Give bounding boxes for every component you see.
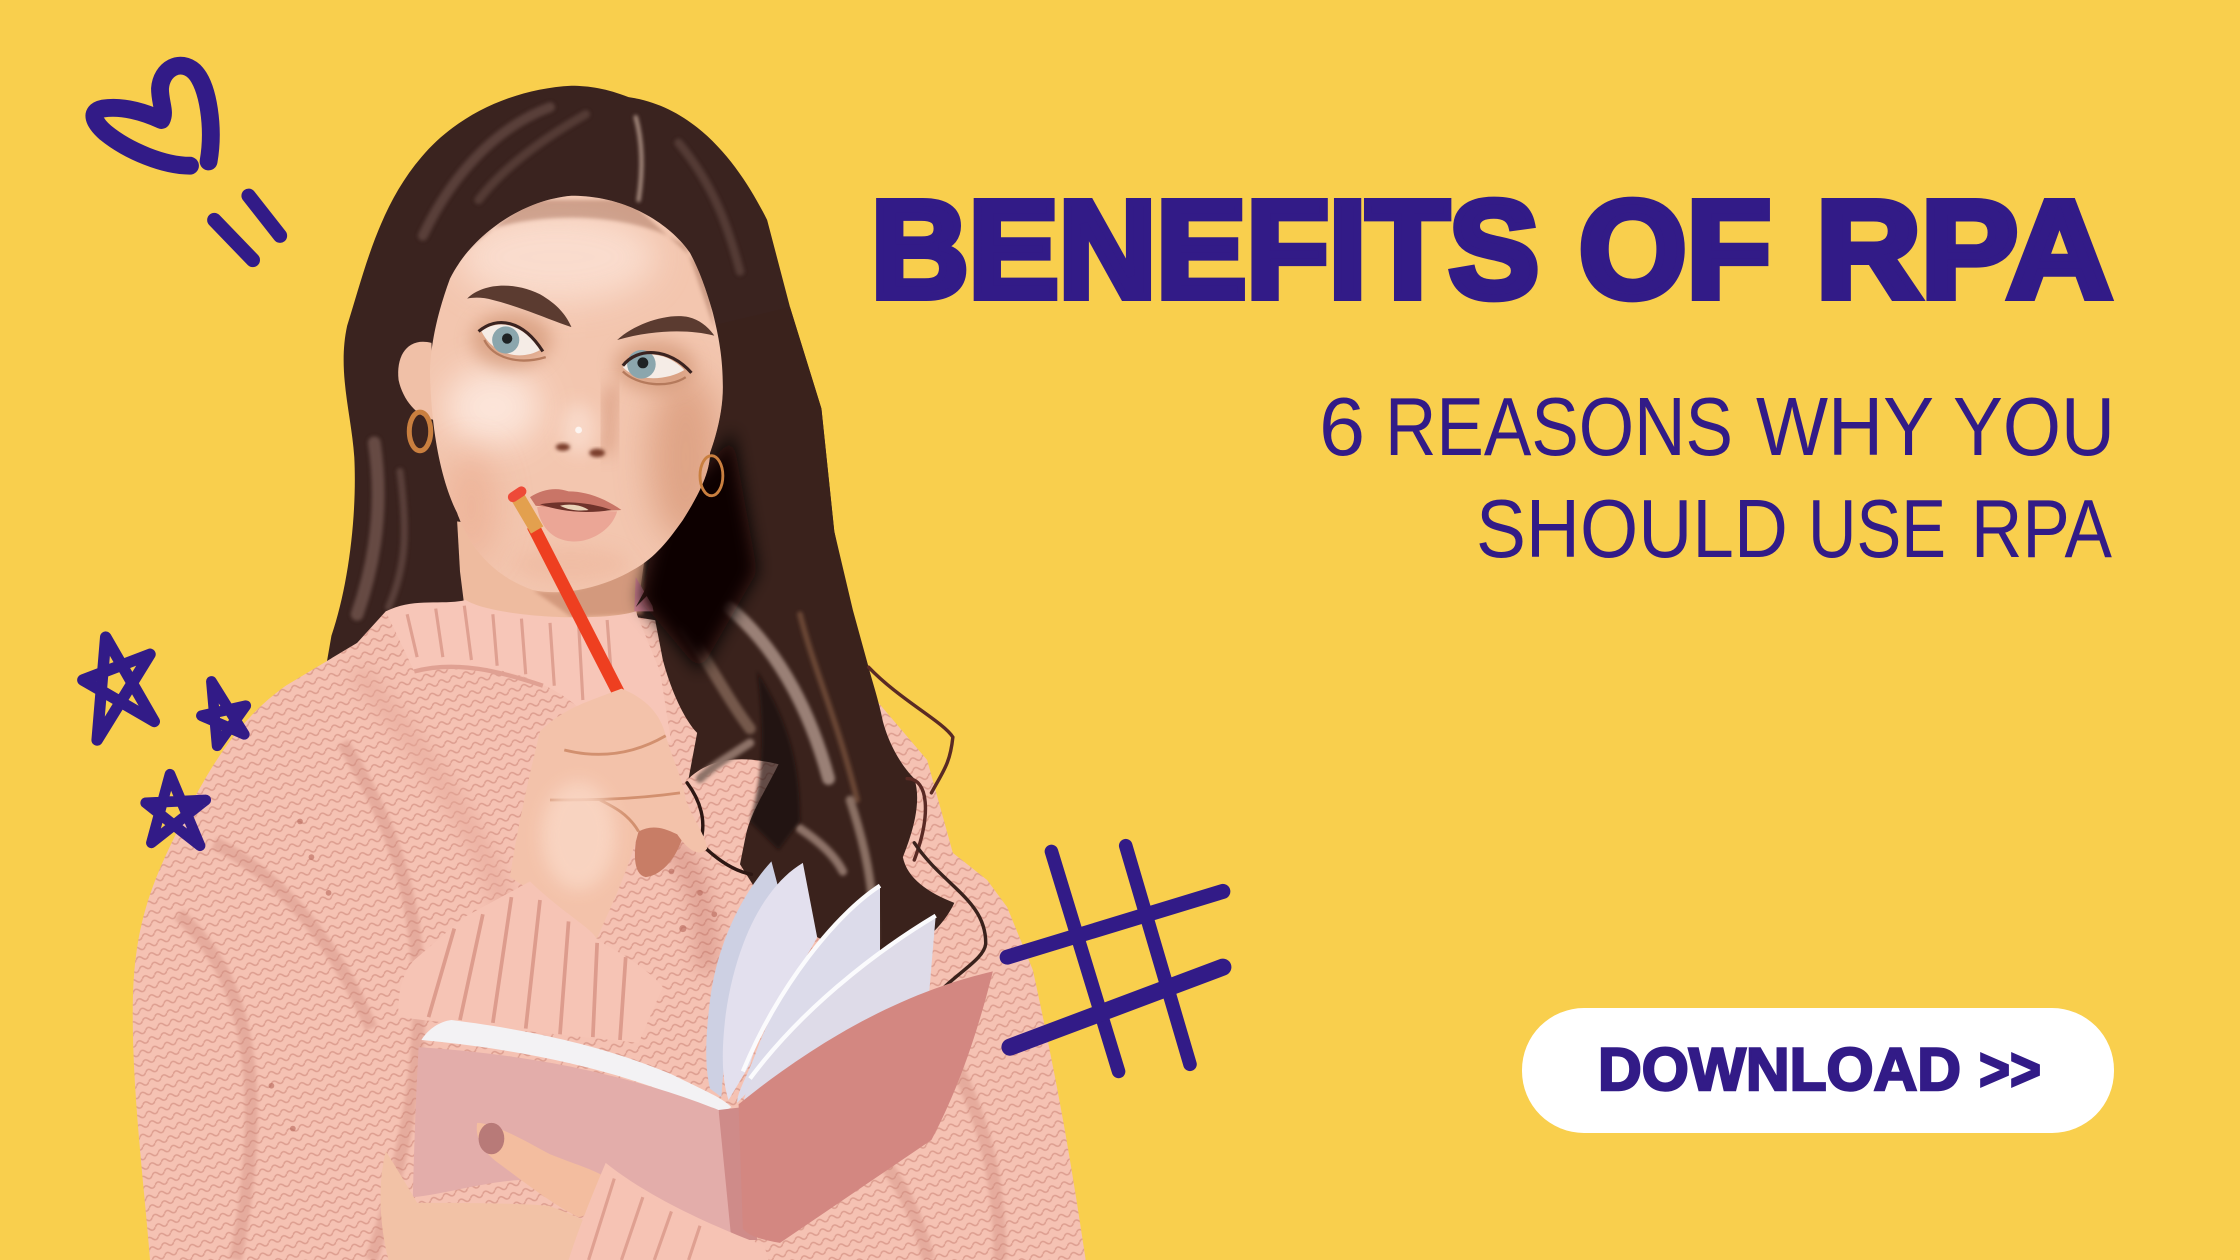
face (430, 196, 723, 592)
button label: DOWNLOAD (1598, 1036, 1961, 1103)
earring right (700, 456, 723, 496)
subtitle line 2: RPA (1971, 482, 2113, 575)
collar tag (634, 577, 656, 611)
right eye (623, 350, 691, 384)
hair highlights (357, 107, 829, 614)
button label: >> (1979, 1036, 2041, 1103)
hand holding pencil (510, 689, 707, 939)
title (871, 173, 2112, 327)
subtitle line 2: USE (1808, 482, 1946, 575)
subtitle line 1: REASONS (1385, 380, 1733, 473)
right cover (739, 971, 993, 1243)
ear (398, 342, 434, 420)
doodle: small star (201, 681, 246, 746)
sleeve cuff (398, 881, 663, 1043)
title: BENEFITS (871, 173, 1539, 327)
subtitle line 1: WHY (1756, 380, 1934, 473)
shadowed finger (635, 817, 686, 877)
nose (556, 427, 605, 457)
earring left (409, 412, 431, 451)
left eye (479, 323, 546, 361)
subtitle line 2: SHOULD (1476, 482, 1788, 575)
subtitle line 2 (1476, 482, 2113, 575)
doodle: hash (1007, 846, 1223, 1071)
loose hair strands (687, 667, 986, 989)
doodle: lower star (146, 774, 206, 846)
fanned pages (706, 861, 779, 1097)
doodle: large star (83, 637, 154, 740)
right hair lock (636, 307, 986, 989)
doodle: dashes (214, 196, 280, 260)
left cover (413, 1047, 737, 1240)
white left page block (421, 1020, 731, 1114)
lips (530, 489, 621, 542)
back hair (326, 86, 857, 669)
download button (1522, 1008, 2114, 1133)
subtitle line 1 (1319, 380, 2115, 473)
pencil (513, 491, 619, 693)
lower hand on notebook (381, 1123, 609, 1260)
sweater (129, 600, 1100, 1260)
doodles (83, 66, 1223, 1071)
subtitle line 1: 6 (1319, 380, 1365, 473)
subtitle (1319, 380, 2115, 575)
eyebrows (467, 286, 714, 340)
collar (386, 600, 671, 743)
doodle: heart (94, 66, 211, 166)
title: OF (1579, 173, 1771, 327)
spine (719, 1107, 757, 1240)
subtitle line 1: YOU (1953, 380, 2115, 473)
woman with notebook photo (129, 86, 1100, 1260)
neck (457, 521, 646, 623)
notebook (413, 861, 993, 1243)
neck shadow (533, 550, 646, 617)
second cuff (569, 1163, 769, 1260)
title: RPA (1816, 173, 2112, 327)
